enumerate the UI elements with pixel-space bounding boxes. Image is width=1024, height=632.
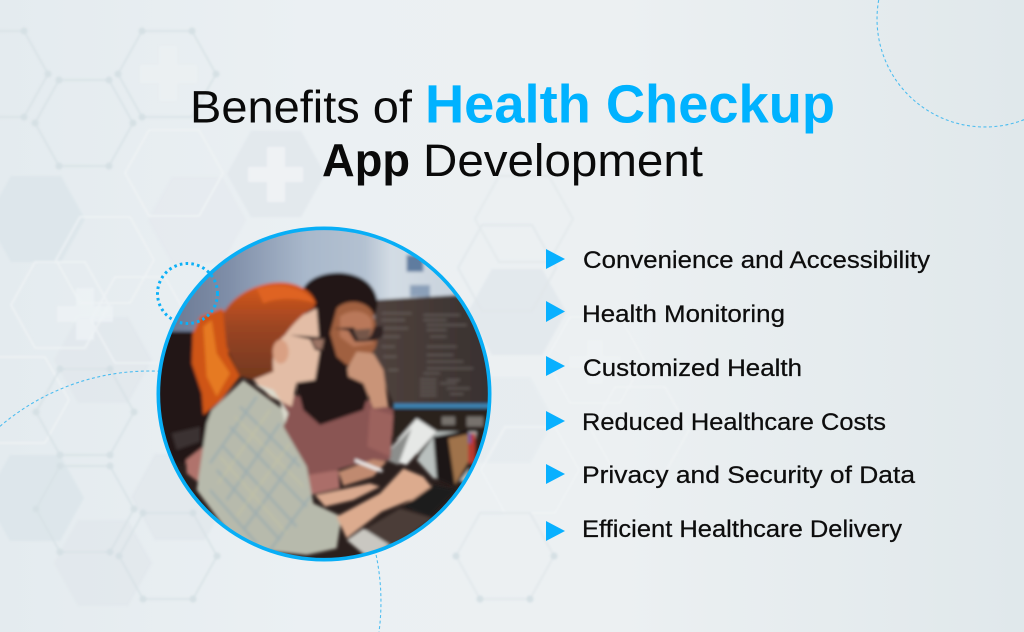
photo: left dark monitor: [157, 332, 220, 463]
benefits list: [546, 247, 931, 543]
decorative dotted small circle: [158, 264, 218, 324]
list item: Health Monitoring: Health Monitoring: [582, 301, 785, 328]
photo: front woman glasses: [290, 335, 325, 352]
photo: window background: [172, 230, 458, 334]
photo blue ring: [158, 228, 490, 560]
background hexagon pattern: [0, 28, 689, 606]
decorative dashed arc: top right: [877, 0, 1024, 127]
photo: wooden organiser: [433, 430, 470, 487]
photo: front woman neck and face: [253, 308, 320, 407]
photo: tablet: [382, 418, 437, 465]
title: [190, 74, 835, 186]
title: second line: Development: [423, 135, 704, 186]
title: first line: Health Checkup: [425, 74, 835, 134]
circular photo: two women at a computer: [153, 227, 493, 560]
title: first line: [190, 74, 835, 134]
list item: Reduced Healthcare Costs: Reduced Healthcare Costs: [582, 409, 886, 436]
title: second line: [322, 134, 704, 186]
photo: back woman sweater: [282, 390, 393, 477]
photo: desk front: [364, 507, 432, 548]
list item: Efficient Healthcare Delivery: Efficient Healthcare Delivery: [582, 516, 903, 543]
photo: orange hair ponytail: [192, 308, 240, 415]
list item: Convenience and Accessibility: Convenience and Accessibility: [583, 247, 931, 274]
photo: front woman hair top: [223, 282, 315, 380]
list item: Customized Health: Customized Health: [583, 355, 802, 382]
photo: front woman plaid shirt: [197, 380, 342, 555]
photo: back woman face: [330, 302, 377, 365]
title: second line: App: [322, 134, 410, 186]
photo: desk background: [390, 408, 493, 487]
photo: keyboard: [403, 485, 457, 517]
photo: back woman hair: [297, 273, 378, 425]
photo: ear: [273, 340, 289, 364]
list item: Privacy and Security of Data: Privacy and Security of Data: [582, 462, 915, 489]
title: first line: Benefits of: [190, 82, 413, 132]
photo: hands and forearms: [338, 459, 387, 486]
decorative dashed arc: lower left: [0, 371, 381, 632]
photo: right code monitor: [373, 295, 493, 404]
